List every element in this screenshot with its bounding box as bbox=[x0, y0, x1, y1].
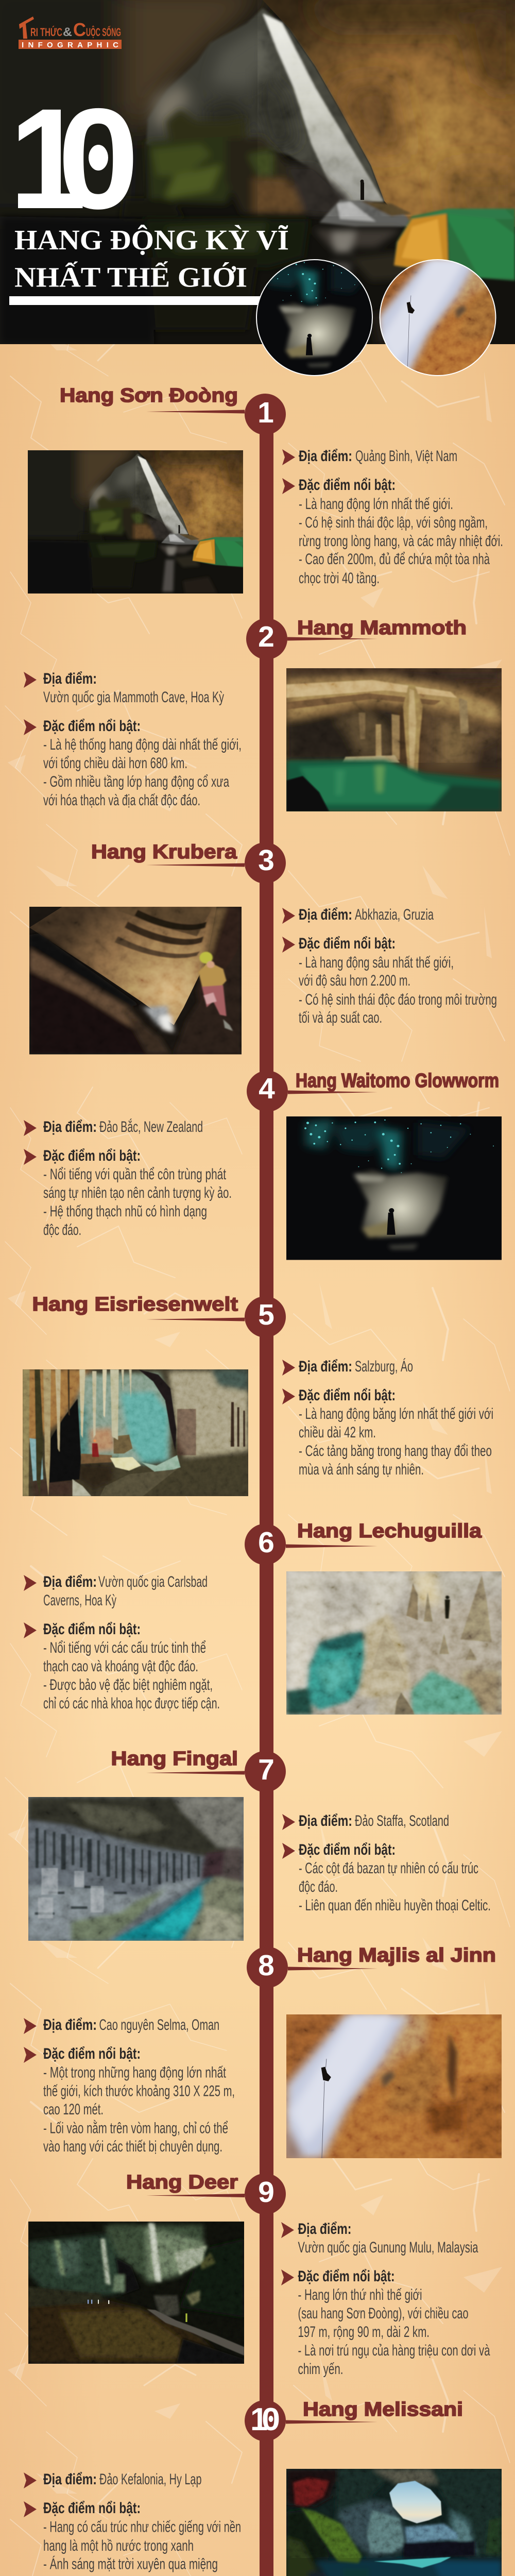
location: Địa điểm: bbox=[299, 906, 352, 923]
highlights: Đặc điểm nổi bật: bbox=[299, 477, 396, 494]
highlights bbox=[282, 1387, 493, 1478]
highlights: Đặc điểm nổi bật: bbox=[43, 2500, 141, 2517]
circle photo: climber bbox=[379, 259, 496, 376]
section 10: Hang Melissani bbox=[24, 2399, 502, 2576]
location bbox=[281, 2221, 478, 2256]
connector bbox=[146, 863, 245, 867]
highlights bbox=[24, 2500, 241, 2576]
location bbox=[24, 670, 224, 706]
highlights: Đặc điểm nổi bật: bbox=[43, 718, 141, 735]
location: Đảo Kefalonia, Hy Lạp bbox=[99, 2471, 202, 2488]
highlights: hang là một hồ nước trong xanh bbox=[43, 2537, 194, 2554]
big number 10 bbox=[9, 78, 139, 239]
photo bbox=[19, 442, 243, 594]
title underline bbox=[9, 296, 262, 305]
highlights: Đặc điểm nổi bật: bbox=[298, 2268, 394, 2285]
highlights: độc đáo. bbox=[43, 1222, 81, 1239]
heading: Hang Sơn Đoòng bbox=[60, 385, 238, 406]
location bbox=[282, 448, 457, 465]
highlights: chỉ có các nhà khoa học được tiếp cận. bbox=[43, 1695, 220, 1712]
highlights: Đặc điểm nổi bật: bbox=[43, 1621, 141, 1638]
highlights: vào hang với các thiết bị chuyên dụng. bbox=[43, 2138, 222, 2155]
location: Địa điểm: bbox=[299, 448, 352, 465]
location: Đảo Staffa, Scotland bbox=[355, 1812, 449, 1829]
highlights: - Hang lớn thứ nhì thế giới bbox=[298, 2286, 422, 2303]
big number 10: 0 bbox=[58, 78, 139, 239]
highlights: - Nổi tiếng với quần thể côn trùng phát bbox=[43, 1166, 226, 1183]
highlights: - Được bảo vệ đặc biệt nghiêm ngặt, bbox=[43, 1676, 213, 1693]
number badge bbox=[246, 618, 287, 659]
photo bbox=[28, 2222, 244, 2364]
heading: Hang Krubera bbox=[91, 841, 237, 863]
heading: Hang Fingal bbox=[111, 1748, 238, 1770]
heading: Hang Lechuguilla bbox=[297, 1520, 482, 1542]
highlights: thế giới, kích thước khoảng 310 X 225 m, bbox=[43, 2082, 235, 2100]
connector bbox=[146, 2194, 245, 2197]
number badge: 3 bbox=[258, 844, 274, 877]
logo: Tri Thức & Cuộc Sống: & bbox=[63, 25, 72, 39]
location: Salzburg, Áo bbox=[355, 1358, 413, 1375]
highlights: cao 120 mét. bbox=[43, 2101, 104, 2118]
section 7: Hang Fingal bbox=[28, 1748, 491, 1941]
connector bbox=[288, 1090, 377, 1094]
highlights bbox=[24, 2045, 235, 2155]
location bbox=[282, 1358, 413, 1376]
section 9: Hang Deer bbox=[28, 2172, 490, 2378]
section 6: Hang Lechuguilla bbox=[24, 1520, 502, 1715]
heading: Hang Mammoth bbox=[297, 617, 467, 639]
logo: Tri Thức & Cuộc Sống: C bbox=[73, 19, 86, 40]
number badge bbox=[245, 394, 286, 435]
connector bbox=[146, 1318, 245, 1321]
highlights: tối và áp suất cao. bbox=[299, 1009, 382, 1026]
number badge: 0 bbox=[262, 2402, 280, 2437]
number badge bbox=[245, 1296, 286, 1337]
location: Địa điểm: bbox=[43, 670, 97, 687]
logo: Tri Thức & Cuộc Sống: INFOGRAPHIC bbox=[22, 41, 118, 49]
hero banner bbox=[0, 0, 515, 376]
photo bbox=[286, 2469, 502, 2576]
highlights: - Gồm nhiều tầng lớp hang động cổ xưa bbox=[43, 773, 229, 790]
logo: Tri Thức & Cuộc Sống: RI THỨC bbox=[30, 26, 62, 39]
highlights: - Lối vào nằm trên vòm hang, chỉ có thể bbox=[43, 2120, 228, 2137]
number badge: 5 bbox=[258, 1298, 274, 1331]
highlights: - Là hệ thống hang động dài nhất thế giới, bbox=[43, 736, 242, 753]
highlights: với tổng chiều dài hơn 680 km. bbox=[43, 755, 187, 772]
photo bbox=[286, 2014, 502, 2158]
photo bbox=[28, 1797, 244, 1941]
number badge: 9 bbox=[258, 2176, 274, 2209]
location: Abkhazia, Gruzia bbox=[355, 906, 434, 923]
location bbox=[24, 2471, 202, 2488]
highlights: mùa và ánh sáng tự nhiên. bbox=[299, 1461, 424, 1478]
section 8: Hang Majlis al Jinn bbox=[24, 1944, 502, 2158]
title: HANG ĐỘNG KỲ VĨ bbox=[14, 224, 289, 256]
connector bbox=[146, 1771, 245, 1774]
highlights: - Ánh sáng mặt trời xuyên qua miệng bbox=[43, 2555, 218, 2573]
highlights: sáng tự nhiên tạo nên cảnh tượng kỳ ảo. bbox=[43, 1184, 232, 1201]
highlights: Đặc điểm nổi bật: bbox=[299, 1841, 396, 1858]
location: Địa điểm: bbox=[299, 1358, 352, 1375]
highlights: độc đáo. bbox=[299, 1878, 338, 1895]
location: Địa điểm: bbox=[43, 2016, 97, 2033]
photo bbox=[286, 1116, 502, 1260]
number badge: 1 bbox=[250, 2402, 268, 2437]
heading: Hang Majlis al Jinn bbox=[297, 1944, 496, 1966]
highlights bbox=[24, 718, 242, 809]
connector bbox=[146, 410, 245, 413]
connector bbox=[286, 2420, 377, 2424]
location bbox=[24, 1118, 203, 1136]
section 4: Hang Waitomo Glowworm bbox=[24, 1070, 502, 1260]
timeline spine bbox=[260, 414, 273, 2576]
heading: Hang Eisriesenwelt bbox=[32, 1294, 238, 1315]
section 1: Hang Sơn Đoòng bbox=[19, 385, 503, 594]
photo bbox=[286, 668, 502, 811]
highlights: thạch cao và khoáng vật độc đáo. bbox=[43, 1658, 198, 1675]
photo bbox=[29, 907, 242, 1054]
location: Cao nguyên Selma, Oman bbox=[99, 2016, 219, 2033]
highlights bbox=[281, 2268, 490, 2378]
title: NHẤT THẾ GIỚI bbox=[14, 262, 247, 293]
location: Địa điểm: bbox=[43, 1573, 97, 1590]
location: Caverns, Hoa Kỳ bbox=[43, 1592, 116, 1609]
section 3: Hang Krubera bbox=[29, 841, 497, 1054]
location: Đảo Bắc, New Zealand bbox=[99, 1118, 203, 1136]
highlights: Đặc điểm nổi bật: bbox=[43, 1147, 141, 1164]
connector bbox=[287, 637, 377, 641]
number badge: 2 bbox=[258, 620, 274, 653]
location: Vườn quốc gia Carlsbad bbox=[98, 1573, 208, 1590]
number badge bbox=[247, 1946, 288, 1988]
number badge: 4 bbox=[259, 1072, 275, 1105]
logo: Tri Thức & Cuộc Sống bbox=[19, 16, 122, 49]
highlights: Đặc điểm nổi bật: bbox=[299, 935, 396, 952]
number badge: 6 bbox=[258, 1526, 274, 1559]
title bbox=[14, 224, 289, 293]
highlights: - Nổi tiếng với các cấu trúc tinh thể bbox=[43, 1639, 206, 1656]
number badge bbox=[245, 1524, 286, 1565]
photo bbox=[23, 1369, 248, 1496]
connector bbox=[286, 1545, 377, 1548]
number badge: 7 bbox=[258, 1753, 274, 1786]
photo bbox=[286, 1571, 502, 1715]
highlights: Đặc điểm nổi bật: bbox=[43, 2045, 141, 2062]
location bbox=[282, 906, 434, 924]
section 5: Hang Eisriesenwelt bbox=[23, 1294, 493, 1496]
highlights: 197 m, rộng 90 m, dài 2 km. bbox=[298, 2324, 430, 2341]
highlights bbox=[282, 477, 503, 587]
highlights: với độ sâu hơn 2.200 m. bbox=[299, 972, 410, 989]
highlights: chiều dài 42 km. bbox=[299, 1424, 376, 1441]
location bbox=[24, 2016, 219, 2034]
connector bbox=[288, 1967, 377, 1970]
number badge bbox=[247, 1071, 288, 1112]
highlights: Đặc điểm nổi bật: bbox=[299, 1387, 396, 1404]
location bbox=[24, 1573, 208, 1609]
heading: Hang Deer bbox=[126, 2172, 238, 2193]
highlights: với hóa thạch và địa chất độc đáo. bbox=[43, 792, 200, 809]
number badge: 8 bbox=[258, 1949, 274, 1982]
highlights: chọc trời 40 tầng. bbox=[299, 570, 380, 587]
location: Địa điểm: bbox=[298, 2221, 351, 2238]
section 2: Hang Mammoth bbox=[24, 617, 502, 811]
location bbox=[282, 1812, 449, 1830]
number badge bbox=[245, 1751, 286, 1792]
number badge bbox=[245, 2173, 286, 2214]
number badge bbox=[245, 842, 286, 884]
heading: Hang Melissani bbox=[303, 2399, 463, 2420]
location: Địa điểm: bbox=[299, 1812, 352, 1829]
highlights: - Một trong những hang động lớn nhất bbox=[43, 2064, 226, 2081]
logo: Tri Thức & Cuộc Sống: UỘC SỐNG bbox=[86, 25, 121, 39]
highlights: chim yến. bbox=[298, 2361, 343, 2378]
highlights bbox=[24, 1621, 220, 1712]
highlights: - Hang có cấu trúc như chiếc giếng với nền bbox=[43, 2518, 241, 2536]
highlights: - Hệ thống thạch nhũ có hình dạng bbox=[43, 1203, 207, 1220]
highlights bbox=[24, 1147, 232, 1239]
highlights bbox=[282, 935, 497, 1026]
circle photo: glowworms bbox=[256, 259, 373, 376]
location: Địa điểm: bbox=[43, 2471, 97, 2488]
location: Địa điểm: bbox=[43, 1118, 97, 1136]
hero photo: cave with light beam bbox=[0, 0, 515, 344]
number badge bbox=[245, 2400, 286, 2441]
location: Vườn quốc gia Mammoth Cave, Hoa Kỳ bbox=[43, 689, 224, 706]
location: Quảng Bình, Việt Nam bbox=[355, 448, 457, 465]
number badge: 1 bbox=[258, 396, 274, 429]
highlights bbox=[282, 1841, 491, 1914]
big number 10: 1 bbox=[9, 78, 87, 239]
